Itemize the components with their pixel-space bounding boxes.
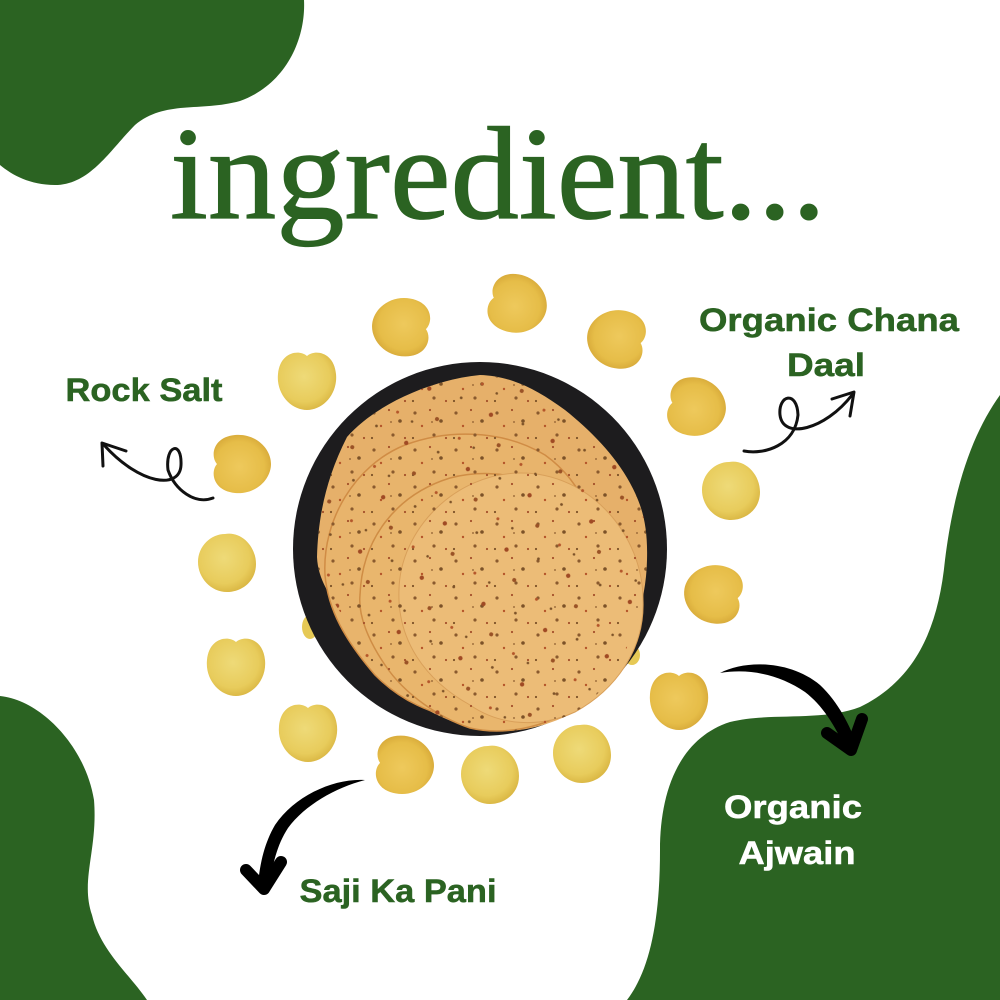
papad specks <box>317 375 647 731</box>
papad stack <box>317 375 647 731</box>
background blob: bottom right <box>627 395 1000 1000</box>
arrow: to Chana Daal <box>744 392 854 452</box>
plate with papads <box>293 362 667 736</box>
label: Organic Ajwain <box>724 789 862 871</box>
arrow: to Organic Ajwain <box>720 664 862 750</box>
plate <box>293 362 667 736</box>
arrow: to Saji Ka Pani <box>246 780 365 889</box>
background blob: top left <box>0 0 304 185</box>
arrow: to Rock Salt <box>102 443 213 500</box>
chickpeas ring <box>198 269 760 804</box>
label: Rock Salt: Rock Salt <box>66 372 223 408</box>
label: Organic Ajwain: Organic <box>724 789 862 825</box>
label: Saji Ka Pani: Saji Ka Pani <box>300 873 496 909</box>
label: Organic Ajwain: Ajwain <box>738 835 856 871</box>
title: ingredient... <box>170 100 826 247</box>
label: Organic Chana Daal: Daal <box>787 347 865 383</box>
label: Organic Chana Daal: Organic Chana <box>699 302 959 338</box>
chickpeas peeking behind plate <box>302 615 640 665</box>
background blob: bottom left <box>0 696 147 1000</box>
label: Organic Chana Daal <box>699 302 959 383</box>
